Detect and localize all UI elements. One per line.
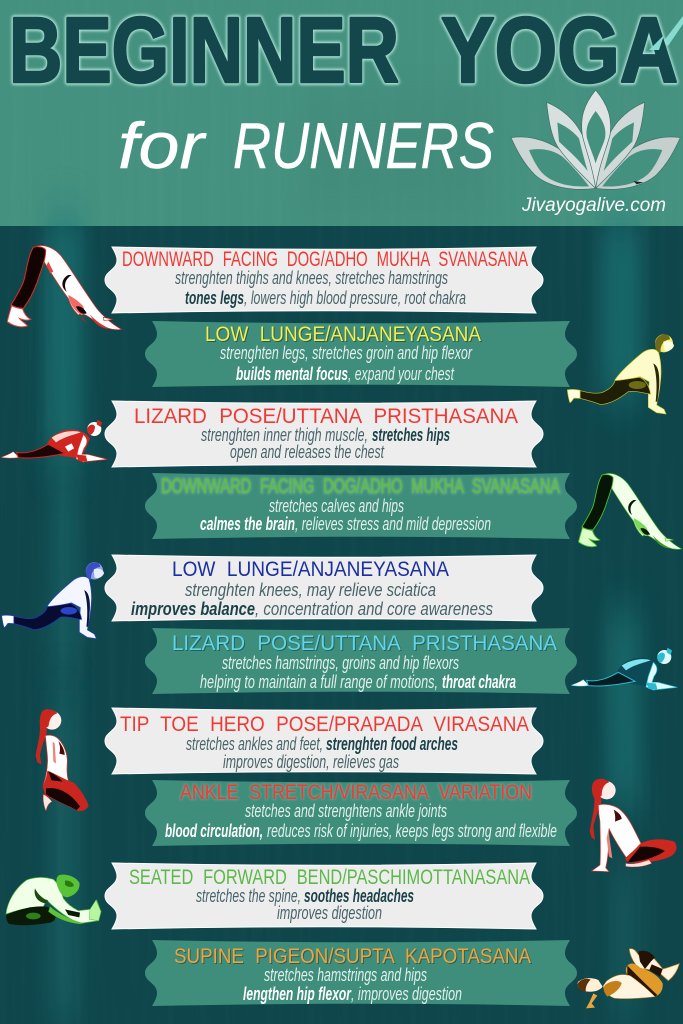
- website label: Jivayogalive.com: [521, 195, 666, 216]
- panel: lizard pose 1: open and releases the chest: [230, 442, 385, 462]
- subtitle: for RUNNERS: for: [118, 109, 207, 182]
- panel: downward facing dog 1: , lowers high blood pressure, root chakra: [244, 288, 466, 308]
- panel: downward facing dog 1: tones legs: [185, 288, 244, 308]
- title: BEGINNER YOGA: BEGINNER: [9, 0, 399, 102]
- panel: seated forward bend: stretches the spine,: [196, 886, 301, 906]
- figure: green downward dog: [579, 473, 682, 549]
- panel: downward facing dog 2: [145, 473, 577, 539]
- panel: lizard pose 1: [105, 401, 543, 467]
- panel: low lunge 1: [145, 321, 577, 387]
- panel: supine pigeon: SUPINE PIGEON/SUPTA KAPOTASANA: [175, 945, 533, 969]
- panel: supine pigeon: [145, 940, 577, 1006]
- figure: blue low lunge: [2, 562, 104, 639]
- panel: ankle stretch: ANKLE STRETCH/VIRASANA VARIATION: [180, 780, 532, 804]
- figure: red downward dog: [7, 246, 122, 330]
- figure: green seated forward bend: [6, 875, 101, 925]
- panel: low lunge 2: improves balance: [131, 599, 255, 619]
- panel: tip toe hero pose: strenghten food arches: [326, 734, 458, 754]
- panel: tip toe hero pose: stretches ankles and feet,: [186, 734, 323, 754]
- panel: ankle stretch: ANKLE STRETCH/VIRASANA VARIATION: [180, 780, 532, 804]
- panel: ankle stretch: stetches and strenghtens ankle joints: [245, 801, 447, 821]
- body background: [0, 215, 683, 1024]
- panel: supine pigeon: stretches hamstrings and hips: [264, 965, 427, 985]
- figure: orange supine pigeon: [577, 949, 679, 1008]
- panel: tip toe hero pose: improves digestion, relieves gas: [223, 752, 399, 772]
- header background: [0, 0, 683, 226]
- panel: lizard pose 1: strenghten inner thigh muscle,: [201, 425, 368, 445]
- panel: downward facing dog 1: strenghten thighs and knees, stretches hamstrings: [175, 268, 448, 288]
- subtitle: for RUNNERS: [118, 109, 494, 182]
- panel: lizard pose 2: helping to maintain a full range of motions,: [200, 672, 438, 692]
- panel: seated forward bend: [105, 863, 543, 929]
- panel: downward facing dog 2: stretches calves and hips: [269, 496, 404, 516]
- panel: tip toe hero pose: [105, 708, 543, 774]
- panel: downward facing dog 2: , relieves stress and mild depression: [295, 514, 491, 534]
- panel: lizard pose 2: throat chakra: [442, 672, 516, 692]
- panel: lizard pose 2: [145, 628, 577, 694]
- panel: low lunge 2: , concentration and core awareness: [255, 599, 493, 619]
- panel: low lunge 1: LOW LUNGE/ANJANEYASANA: [205, 322, 482, 346]
- figure: red tip toe hero: [36, 709, 89, 811]
- panel: supine pigeon: lengthen hip flexor: [243, 984, 352, 1004]
- panel: low lunge 1: strenghten legs, stretches groin and hip flexor: [220, 343, 473, 363]
- panel: low lunge 1: builds mental focus: [236, 364, 348, 384]
- figure: cyan lizard: [571, 648, 677, 690]
- panel: lizard pose 2: LIZARD POSE/UTTANA PRISTHASANA: [172, 631, 558, 655]
- panel: lizard pose 2: stretches hamstrings, groins and hip flexors: [222, 653, 459, 673]
- panel: low lunge 2: strenghten knees, may relieve sciatica: [185, 580, 436, 600]
- panel: lizard pose 1: stretches hips: [372, 425, 450, 445]
- panel: lizard pose 1: LIZARD POSE/UTTANA PRISTHASANA: [134, 404, 519, 428]
- panel: downward facing dog 1: [105, 247, 543, 313]
- icon: lotus logo: [511, 85, 683, 189]
- panel: seated forward bend: improves digestion: [277, 903, 382, 923]
- panel: low lunge 1: LOW LUNGE/ANJANEYASANA: [206, 323, 483, 347]
- panel: tip toe hero pose: TIP TOE HERO POSE/PRAPADA VIRASANA: [120, 712, 530, 736]
- panel: lizard pose 2: LIZARD POSE/UTTANA PRISTHASANA: [173, 632, 559, 656]
- panel: seated forward bend: soothes headaches: [304, 886, 414, 906]
- panel: ankle stretch: [145, 780, 577, 846]
- figure: yellow low lunge: [567, 334, 674, 414]
- figure: red lizard: [1, 420, 107, 462]
- panel: low lunge 1: , expand your chest: [348, 364, 455, 384]
- panel: supine pigeon: , improves digestion: [351, 984, 462, 1004]
- title: BEGINNER YOGA: BEGINNER: [9, 0, 399, 102]
- figure: red ankle stretch: [590, 779, 676, 872]
- panel: low lunge 2: LOW LUNGE/ANJANEYASANA: [172, 557, 450, 581]
- subtitle: for RUNNERS: RUNNERS: [233, 109, 494, 182]
- panel: downward facing dog 2: calmes the brain: [200, 514, 295, 534]
- panel: low lunge 2: [105, 555, 543, 621]
- panel: seated forward bend: SEATED FORWARD BEND/PASCHIMOTTANASANA: [129, 865, 530, 889]
- panel: ankle stretch: blood circulation,: [165, 821, 263, 841]
- panel: supine pigeon: SUPINE PIGEON/SUPTA KAPOTASANA: [174, 944, 532, 968]
- panel: ankle stretch: reduces risk of injuries, keeps legs strong and flexible: [267, 821, 557, 841]
